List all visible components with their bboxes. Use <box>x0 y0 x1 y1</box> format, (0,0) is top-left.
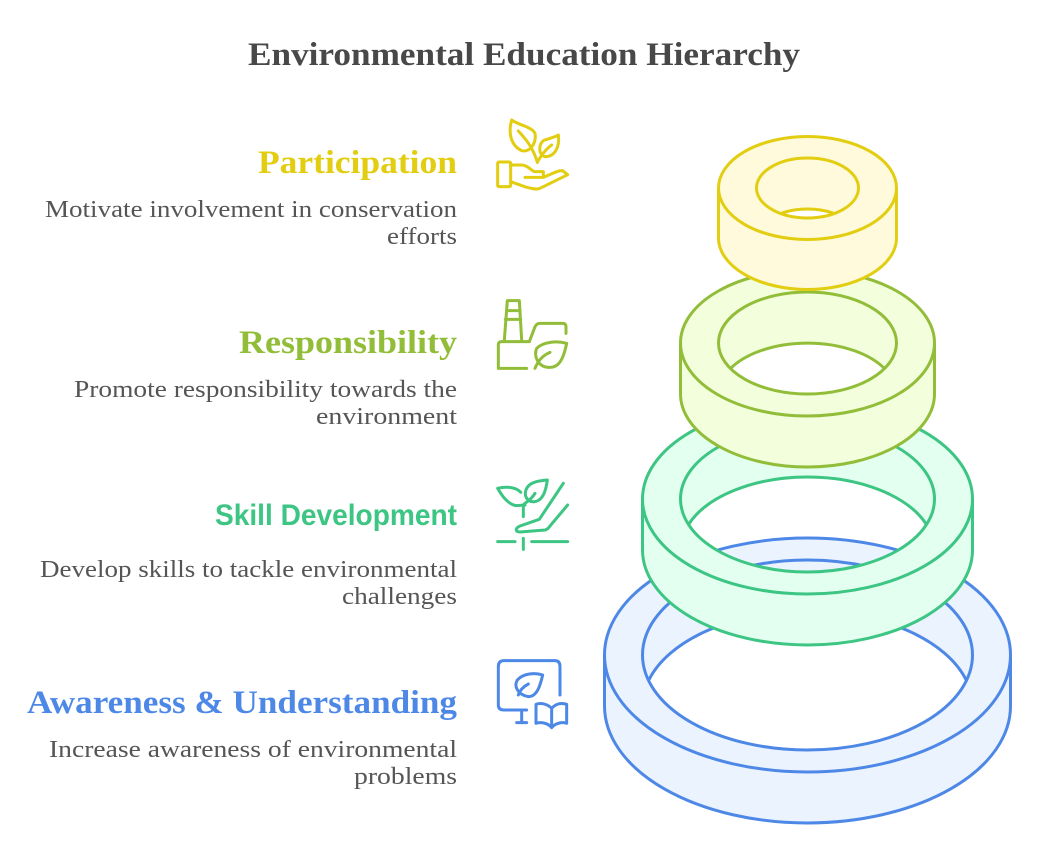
text block: skill development: Skill Development <box>215 499 457 532</box>
text block: awareness and understanding: Increase awareness of environmental <box>49 737 457 763</box>
text block: participation: Participation <box>258 145 457 181</box>
text block: participation: efforts <box>387 224 457 250</box>
text block: participation <box>45 145 457 250</box>
panel: skill development ring <box>642 404 972 645</box>
icon: hand holding plant <box>498 120 568 189</box>
icon: hand planting sprout <box>498 480 568 549</box>
text block: skill development: Develop skills to tackle environmental <box>40 557 457 583</box>
text block: skill development <box>40 499 457 610</box>
text block: responsibility: environment <box>316 404 457 430</box>
icon: factory with leaf <box>498 301 567 368</box>
text block: awareness and understanding: Awareness & Understanding <box>27 685 458 721</box>
panel: awareness ring <box>604 538 1010 823</box>
text block: responsibility: Promote responsibility towards the <box>74 377 457 403</box>
text block: responsibility: Responsibility <box>239 325 458 361</box>
icon: monitor with leaf and book <box>498 661 567 728</box>
title: Environmental Education Hierarchy <box>248 37 801 73</box>
panel: responsibility ring <box>680 270 934 467</box>
text block: awareness and understanding <box>27 685 458 790</box>
text block: responsibility <box>74 325 458 430</box>
text block: awareness and understanding: problems <box>354 764 457 790</box>
text block: participation: Motivate involvement in conservation <box>45 197 457 223</box>
panel: participation ring <box>718 136 896 290</box>
text block: skill development: challenges <box>342 584 457 610</box>
